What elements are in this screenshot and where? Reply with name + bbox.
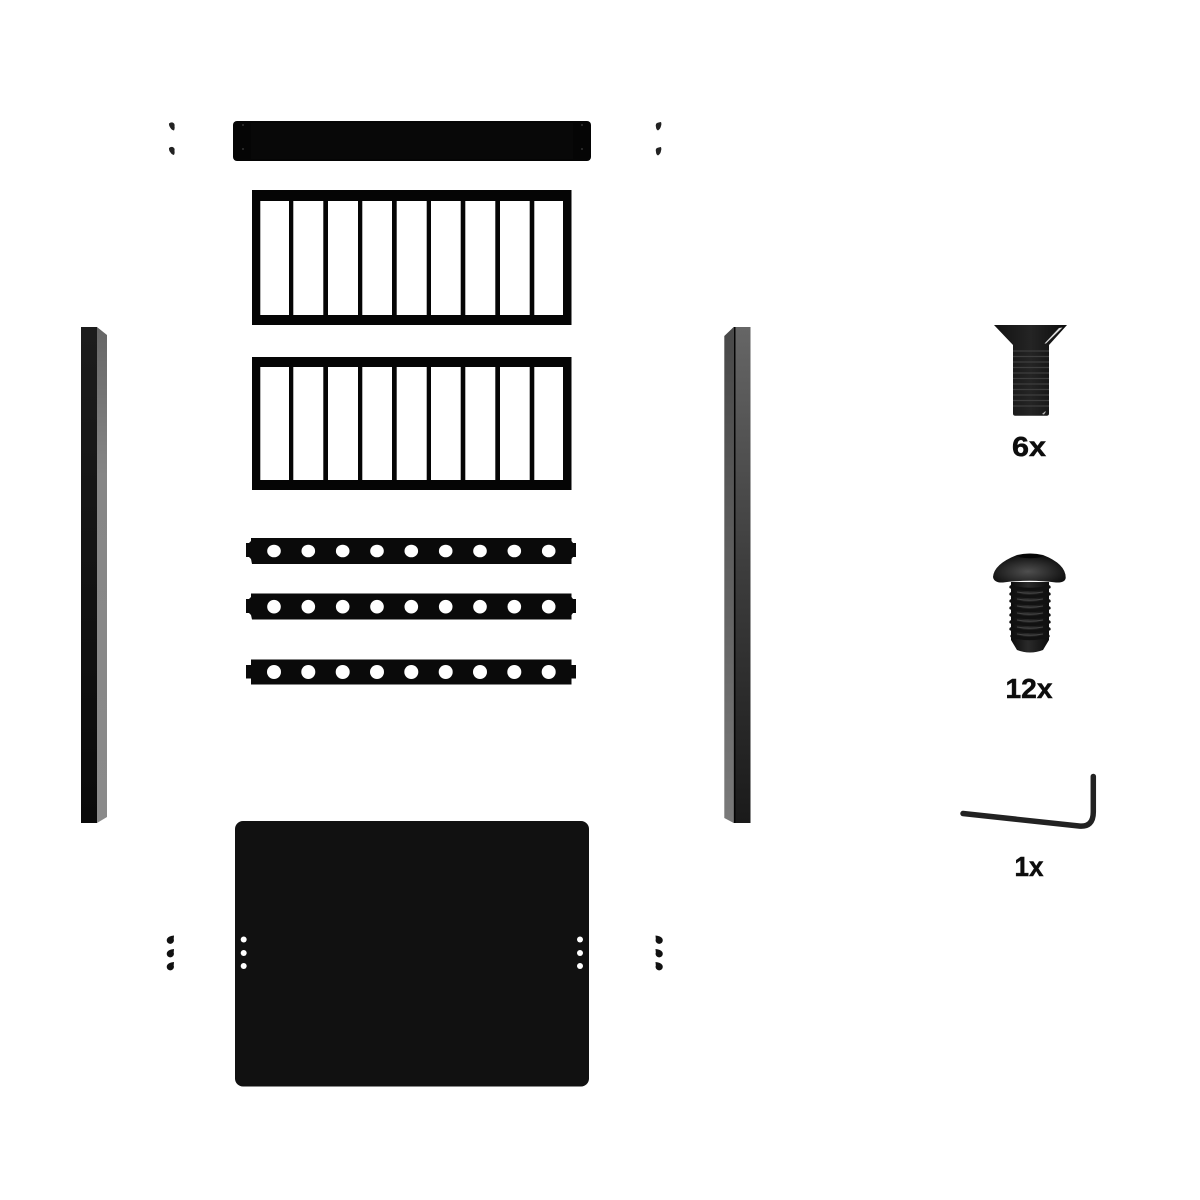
top rail screws, right	[656, 122, 661, 156]
right post	[724, 327, 750, 823]
base plate screws, right	[656, 936, 663, 970]
perforated strip 2	[246, 594, 576, 620]
top rail	[233, 121, 591, 161]
perforated strip 3	[246, 660, 576, 684]
icon: hex key	[963, 776, 1093, 826]
label: 1x: 1x	[1014, 851, 1044, 882]
lower slatted panel	[252, 357, 572, 490]
base plate	[235, 821, 589, 1086]
label: 12x: 12x	[1006, 673, 1053, 704]
upper slatted panel	[252, 190, 572, 325]
icon: countersunk screw	[994, 325, 1067, 416]
perforated strip 1	[246, 538, 576, 564]
base plate screws, left	[167, 936, 174, 970]
icon: button head screw	[993, 554, 1066, 652]
top rail screws, left	[169, 122, 175, 155]
label: 6x: 6x	[1012, 431, 1046, 462]
left post	[81, 327, 107, 823]
